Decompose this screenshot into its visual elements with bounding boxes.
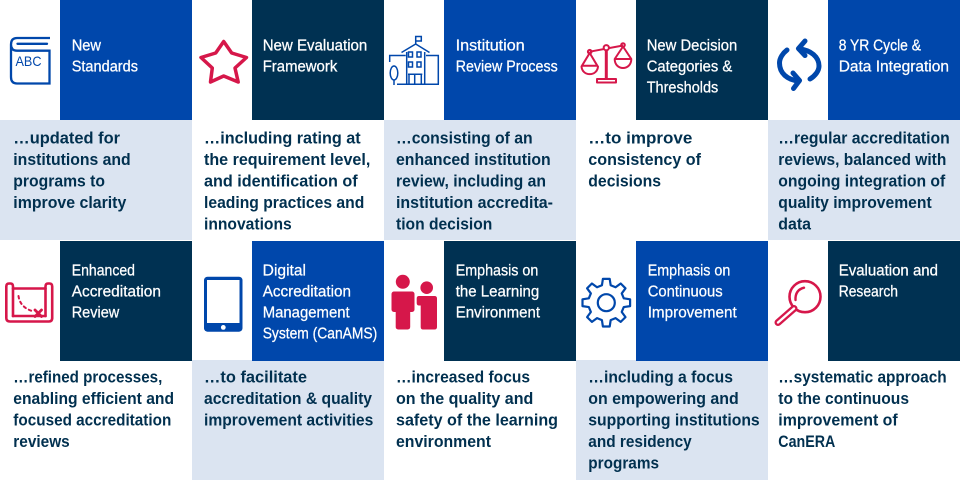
heading block xyxy=(252,241,384,361)
description text: tion decision xyxy=(396,214,492,233)
description text: quality improvement xyxy=(778,193,932,212)
description text: innovations xyxy=(204,214,292,233)
heading block xyxy=(444,0,576,120)
heading block: Digital xyxy=(263,262,306,279)
description text xyxy=(778,128,950,233)
heading block: Thresholds xyxy=(647,79,719,96)
description text: leading practices and xyxy=(204,193,364,212)
icon: book: ABC xyxy=(16,53,42,69)
description text: …regular accreditation xyxy=(778,128,950,147)
heading block: New Evaluation xyxy=(263,37,367,54)
description text: CanERA xyxy=(778,432,835,451)
description text: improve clarity xyxy=(13,193,127,212)
description text: supporting institutions xyxy=(588,410,760,429)
description text xyxy=(778,367,947,451)
panel: 8 YR Cycle and Data Integration xyxy=(768,0,960,240)
heading block: Emphasis on xyxy=(456,262,538,279)
description text: focused accreditation xyxy=(13,410,171,429)
description text: improvement activities xyxy=(204,410,373,429)
heading block xyxy=(252,0,384,120)
panel: New Decision Categories and Thresholds xyxy=(576,0,768,240)
heading block: Continuous xyxy=(648,283,723,300)
description text: …systematic approach xyxy=(778,367,947,386)
description text xyxy=(204,128,370,233)
heading block: Accreditation xyxy=(263,283,351,300)
panel: Institution Review Process xyxy=(384,0,576,240)
description text: programs xyxy=(588,453,659,472)
description text xyxy=(204,367,373,429)
description text: …consisting of an xyxy=(396,128,533,147)
description text: …increased focus xyxy=(396,367,530,386)
panel: Digital Accreditation Management System xyxy=(192,240,384,480)
description text: accreditation & quality xyxy=(204,389,372,408)
icon: magnifying glass xyxy=(778,281,820,322)
description text: environment xyxy=(396,432,491,451)
panel: Emphasis on the Learning Environment xyxy=(384,240,576,480)
heading block: the Learning xyxy=(456,283,539,300)
description text: institution accredita- xyxy=(396,193,553,212)
description text: ongoing integration of xyxy=(778,171,946,190)
heading block: Accreditation xyxy=(72,283,161,300)
description text: and residency xyxy=(588,432,692,451)
panel: New Standards xyxy=(0,0,192,240)
heading block: 8 YR Cycle & xyxy=(839,37,922,54)
description text: programs to xyxy=(13,171,105,190)
description text: and identification of xyxy=(204,171,358,190)
description text: enabling efficient and xyxy=(13,389,174,408)
icon: book xyxy=(11,38,50,84)
description text xyxy=(588,367,760,472)
heading block: System (CanAMS) xyxy=(263,325,377,342)
heading block: Categories & xyxy=(647,58,733,75)
heading block: Evaluation and xyxy=(839,262,938,279)
heading block xyxy=(636,0,768,120)
description text: reviews, balanced with xyxy=(778,150,946,169)
description text: the requirement level, xyxy=(204,150,370,169)
icon: star xyxy=(201,42,246,82)
panel: Evaluation and Research xyxy=(768,240,960,480)
heading block: Review xyxy=(72,304,120,321)
description text xyxy=(13,128,131,212)
heading block: New xyxy=(72,37,102,54)
description text: review, including an xyxy=(396,171,546,190)
description text: reviews xyxy=(13,432,70,451)
panel: New Evaluation Framework xyxy=(192,0,384,240)
description text: on the quality and xyxy=(396,389,533,408)
description text: …refined processes, xyxy=(13,367,162,386)
heading block xyxy=(60,241,192,361)
icon: balance scales xyxy=(582,43,631,82)
heading block xyxy=(828,241,960,361)
heading block xyxy=(444,241,576,361)
icon: gear xyxy=(582,279,630,326)
icon: tablet xyxy=(204,277,242,332)
heading block: Enhanced xyxy=(72,262,135,279)
heading block xyxy=(60,0,192,120)
description text: institutions and xyxy=(13,150,131,169)
description text: enhanced institution xyxy=(396,150,551,169)
description text: …updated for xyxy=(13,128,120,147)
description text: safety of the learning xyxy=(396,410,558,429)
description text: data xyxy=(778,214,811,233)
heading block: Standards xyxy=(72,58,138,75)
description text: decisions xyxy=(588,171,661,190)
panel: Emphasis on Continuous Improvement xyxy=(576,240,768,480)
heading block: Improvement xyxy=(648,304,737,321)
heading block: New Decision xyxy=(647,37,737,54)
icon: two people xyxy=(392,275,437,330)
heading block: Management xyxy=(263,304,350,321)
description text: …including a focus xyxy=(588,367,733,386)
heading block: Emphasis on xyxy=(648,262,730,279)
icon: cycle arrows xyxy=(780,41,819,88)
description text: …including rating at xyxy=(204,128,361,147)
heading block: Data Integration xyxy=(839,58,949,75)
heading block: Environment xyxy=(456,304,541,321)
heading block: Institution xyxy=(456,37,525,54)
heading block: Research xyxy=(839,283,898,300)
description text xyxy=(588,128,701,190)
description text xyxy=(396,367,558,451)
icon: map with route xyxy=(6,284,52,322)
description text: …to facilitate xyxy=(204,367,307,386)
heading block xyxy=(828,0,960,120)
description text: consistency of xyxy=(588,150,701,169)
description text xyxy=(13,367,174,451)
description text: on empowering and xyxy=(588,389,739,408)
heading block: Review Process xyxy=(456,58,558,75)
description text: improvement of xyxy=(778,410,898,429)
heading block: Framework xyxy=(263,58,338,75)
description text: to the continuous xyxy=(778,389,909,408)
heading block xyxy=(636,241,768,361)
icon: institution building xyxy=(390,36,439,85)
description text: …to improve xyxy=(588,128,692,147)
description text xyxy=(396,128,553,233)
panel: Enhanced Accreditation Review xyxy=(0,240,192,480)
